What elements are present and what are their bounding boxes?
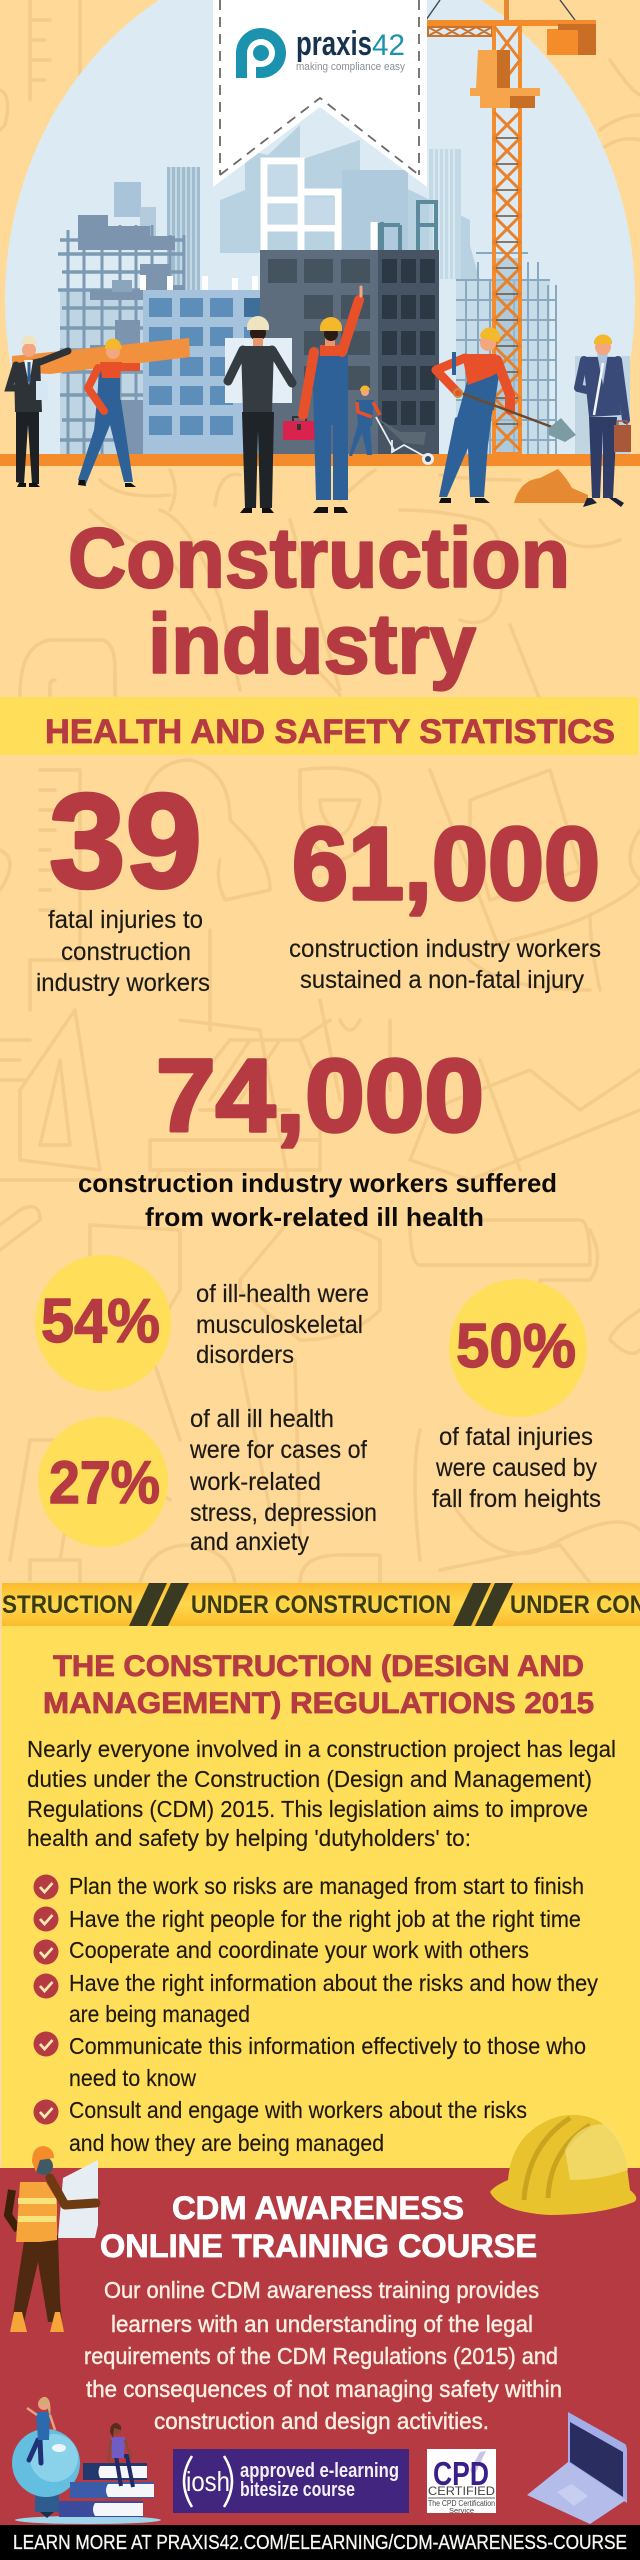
- icon: lightbulb with woman: [12, 2397, 161, 2524]
- stat: 27%: work-related: [189, 1468, 321, 1496]
- toolbox: [283, 417, 315, 440]
- course description: Our online CDM awareness training provides: [104, 2277, 539, 2303]
- course heading: [100, 2190, 537, 2264]
- checklist text: Plan the work so risks are managed from start to finish: [69, 1873, 584, 1899]
- checklist text: [69, 1873, 598, 2156]
- worker: suit with briefcase: [578, 335, 631, 507]
- tower crane: [426, 0, 596, 454]
- regulations intro text: Nearly everyone involved in a construction project has legal: [27, 1736, 616, 1762]
- checklist text: and how they are being managed: [69, 2130, 384, 2156]
- stat: 74,000 ill health: from work-related ill health: [145, 1202, 484, 1232]
- sand pile: [514, 469, 588, 503]
- stat: 54%: musculoskeletal: [196, 1311, 363, 1339]
- checklist text: Cooperate and coordinate your work with others: [69, 1937, 529, 1963]
- stat: 54%: 54%: [41, 1287, 160, 1356]
- stat: 61,000 non-fatal: construction industry workers: [289, 935, 601, 963]
- praxis42 logo: making compliance easy: [296, 61, 405, 73]
- worker: suit left: [9, 336, 68, 487]
- course description: construction and design activities.: [154, 2408, 489, 2434]
- stat: 50%: 50%: [456, 1312, 576, 1381]
- checklist text: Have the right information about the risks and how they: [69, 1970, 598, 1996]
- stat: 27%: 27%: [49, 1449, 160, 1516]
- worker reading plan: [8, 2146, 98, 2332]
- check icons: [34, 1874, 58, 2124]
- regulations intro text: health and safety by helping 'dutyholders' to:: [27, 1825, 471, 1851]
- checklist text: need to know: [69, 2065, 196, 2091]
- praxis42 logo: praxis: [296, 25, 372, 63]
- regulations heading: MANAGEMENT) REGULATIONS 2015: [43, 1687, 594, 1720]
- badge: iosh: [173, 2449, 409, 2513]
- regulations intro text: duties under the Construction (Design and Management): [27, 1766, 592, 1792]
- stat: 74,000 ill health: [78, 1038, 557, 1232]
- regulations heading: THE CONSTRUCTION (DESIGN AND: [53, 1650, 584, 1683]
- stat: 39 fatal injuries: [36, 767, 210, 997]
- badge: CPD certified: CERTIFIED: [428, 2484, 495, 2498]
- panel: training course: [0, 2115, 640, 2525]
- stat: 54%: [35, 1255, 369, 1391]
- icon: stack of books with woman: [59, 2423, 154, 2517]
- regulations heading: [43, 1650, 594, 1720]
- stat: 54%: of ill-health were: [196, 1280, 369, 1308]
- checklist text: Consult and engage with workers about the risks: [69, 2097, 527, 2123]
- under construction tape: UNDER CONSTRUCTION: [191, 1591, 451, 1619]
- stat: 61,000 non-fatal: sustained a non-fatal injury: [300, 966, 584, 994]
- stat: 27%: [38, 1405, 377, 1556]
- stat: 27%: and anxiety: [190, 1528, 309, 1556]
- stat: 74,000 ill health: 74,000: [156, 1038, 484, 1153]
- under construction tape: [2, 1583, 640, 1626]
- right scaffold building: [456, 253, 556, 454]
- stat: 50%: fall from heights: [432, 1485, 601, 1513]
- duties checklist: [34, 1873, 598, 2156]
- course description: [84, 2277, 562, 2434]
- worker: carrying plank: [78, 338, 140, 487]
- panel: CDM regulations: [2, 1583, 640, 2168]
- course description: the consequences of not managing safety within: [86, 2376, 562, 2402]
- stat: 74,000 ill health: construction industry workers suffered: [78, 1168, 557, 1198]
- badge: iosh: bitesize course: [240, 2479, 355, 2501]
- hero illustration: [0, 0, 640, 513]
- stat: 39 fatal injuries: fatal injuries to: [48, 906, 203, 934]
- icon: hard hat: [490, 2115, 636, 2215]
- teal frame on roof: [380, 202, 436, 250]
- worker: back view with plan: [225, 316, 292, 513]
- left scaffold building: [58, 215, 190, 454]
- plank: [12, 338, 190, 374]
- worker: wheelbarrow: [349, 385, 434, 465]
- stat: 50%: were caused by: [435, 1454, 597, 1482]
- course heading: ONLINE TRAINING COURSE: [100, 2228, 537, 2264]
- skyline buildings: [114, 125, 630, 454]
- stat: 39 fatal injuries: construction: [61, 938, 191, 966]
- praxis42 logo: 42: [372, 29, 405, 62]
- regulations intro text: [27, 1736, 616, 1851]
- course heading: CDM AWARENESS: [172, 2190, 464, 2226]
- badge: CPD certified: Service: [449, 2508, 474, 2515]
- worker: shovel: [436, 327, 576, 503]
- stat: 27%: stress, depression: [190, 1499, 377, 1527]
- stat: 39 fatal injuries: 39: [49, 767, 202, 916]
- course description: requirements of the CDM Regulations (2015) and: [84, 2343, 558, 2369]
- subtitle band: [0, 697, 638, 755]
- title: [68, 511, 570, 691]
- badge: CPD certified: [427, 2449, 496, 2515]
- subtitle band: HEALTH AND SAFETY STATISTICS: [45, 713, 615, 751]
- stat: 50%: [432, 1279, 601, 1513]
- sky dome: [5, 0, 635, 454]
- course description: learners with an understanding of the legal: [111, 2311, 533, 2337]
- stat: 50%: of fatal injuries: [439, 1423, 593, 1451]
- badge: CPD certified: The CPD Certification: [428, 2499, 495, 2508]
- title: industry: [148, 597, 476, 691]
- white frame building: [264, 161, 374, 250]
- badge: iosh: iosh: [186, 2466, 230, 2497]
- under construction tape: STRUCTION: [2, 1591, 133, 1619]
- blue building: [143, 275, 293, 454]
- regulations intro text: Regulations (CDM) 2015. This legislation aims to improve: [27, 1796, 588, 1822]
- praxis42 logo: [236, 25, 405, 78]
- footer call to action: [0, 2525, 640, 2560]
- checklist text: Have the right people for the right job at the right time: [69, 1906, 581, 1932]
- icon: laptop: [527, 2412, 627, 2524]
- stat: 39 fatal injuries: industry workers: [36, 969, 210, 997]
- stat: 54%: disorders: [196, 1341, 294, 1369]
- badge: CPD certified: CPD: [433, 2455, 489, 2492]
- stat: 61,000 non-fatal: [289, 806, 601, 994]
- worker: raised arm: [303, 287, 361, 513]
- stat: 61,000 non-fatal: 61,000: [292, 806, 600, 921]
- checklist text: Communicate this information effectively to those who: [69, 2033, 586, 2059]
- badge: iosh: approved e-learning: [240, 2460, 399, 2482]
- dark building: [260, 250, 439, 454]
- stat: 27%: were for cases of: [189, 1436, 367, 1464]
- ground stripe: [0, 454, 640, 466]
- title: Construction: [68, 511, 570, 605]
- stat: 27%: of all ill health: [190, 1405, 334, 1433]
- logo banner: [213, 0, 427, 187]
- checklist text: are being managed: [69, 2001, 250, 2027]
